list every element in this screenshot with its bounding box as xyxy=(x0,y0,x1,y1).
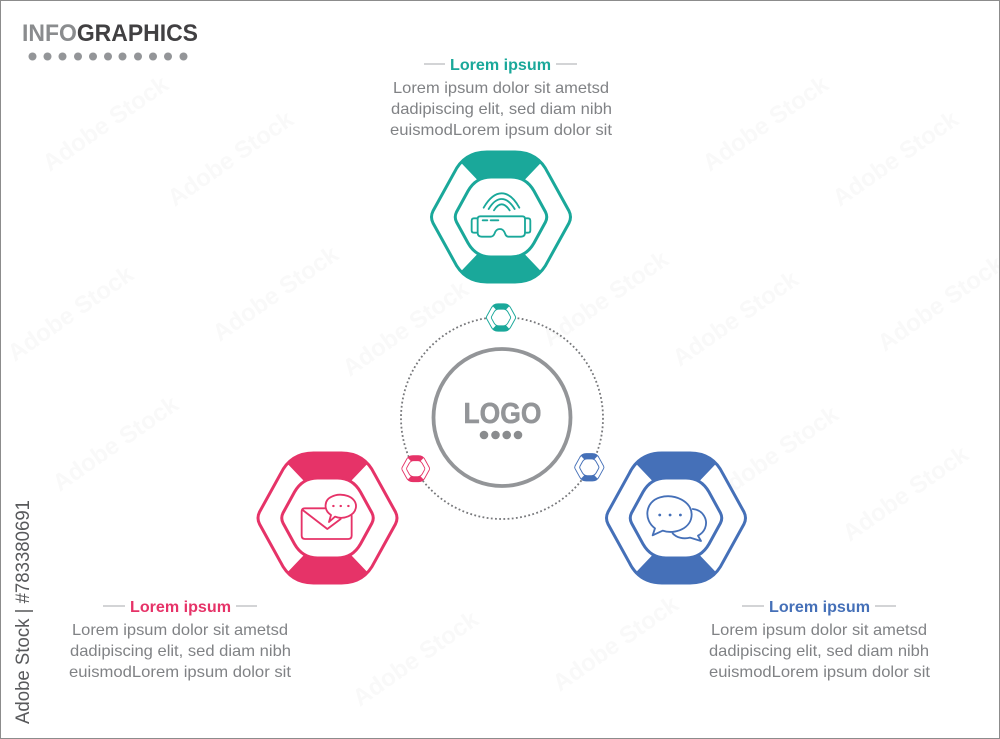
text block: right xyxy=(709,599,931,681)
small hexagon: pink xyxy=(402,456,430,482)
watermark: Adobe Stock xyxy=(698,70,834,177)
icon: VR goggles xyxy=(472,193,530,237)
text block: left: euismodLorem ipsum dolor sit xyxy=(69,664,292,681)
text block: left: Lorem ipsum dolor sit ametsd xyxy=(72,622,288,639)
hexagon: blue xyxy=(606,453,746,583)
watermark: Adobe Stock xyxy=(828,105,964,212)
title xyxy=(22,20,198,60)
text block: left: dadipiscing elit, sed diam nibh xyxy=(70,643,291,660)
title: INFOGRAPHICS xyxy=(22,20,198,47)
text block: top: Lorem ipsum dolor sit ametsd xyxy=(393,80,609,97)
watermark: Adobe Stock xyxy=(48,390,184,497)
dotted ring xyxy=(401,317,603,519)
icon: mail with speech bubble xyxy=(302,495,356,539)
small hexagon: blue xyxy=(575,454,604,481)
logo dots xyxy=(480,431,522,439)
watermark: Adobe Stock xyxy=(338,275,474,382)
text block: right: Lorem ipsum xyxy=(769,599,870,616)
watermark: Adobe Stock xyxy=(668,265,804,372)
text block: top xyxy=(390,57,613,139)
watermark: Adobe Stock xyxy=(838,440,974,547)
text block: right: dadipiscing elit, sed diam nibh xyxy=(709,643,929,660)
small hexagon: teal xyxy=(486,304,516,331)
text block: right: euismodLorem ipsum dolor sit xyxy=(709,664,931,681)
logo circle: LOGO xyxy=(464,398,542,430)
icon: chat bubbles xyxy=(647,496,706,541)
watermark: Adobe Stock xyxy=(208,240,344,347)
stock id: Adobe Stock | #783380691 xyxy=(13,500,34,724)
watermark: Adobe Stock xyxy=(538,245,674,352)
text block: left: Lorem ipsum xyxy=(130,599,231,616)
watermark: Adobe Stock xyxy=(163,105,299,212)
watermark: Adobe Stock xyxy=(348,605,484,712)
watermark: Adobe Stock xyxy=(708,400,844,507)
hexagon: teal xyxy=(432,152,570,282)
text block: top: dadipiscing elit, sed diam nibh xyxy=(391,101,612,118)
watermark: Adobe Stock xyxy=(3,260,139,367)
text block: left xyxy=(69,599,292,681)
watermark: Adobe Stock xyxy=(548,590,684,697)
hexagon: pink xyxy=(258,453,397,583)
text block: right: Lorem ipsum dolor sit ametsd xyxy=(711,622,927,639)
text block: top: euismodLorem ipsum dolor sit xyxy=(390,122,613,139)
logo circle xyxy=(434,349,570,486)
text block: top: Lorem ipsum xyxy=(450,57,551,74)
title dots xyxy=(28,52,188,60)
watermark: Adobe Stock xyxy=(38,70,174,177)
